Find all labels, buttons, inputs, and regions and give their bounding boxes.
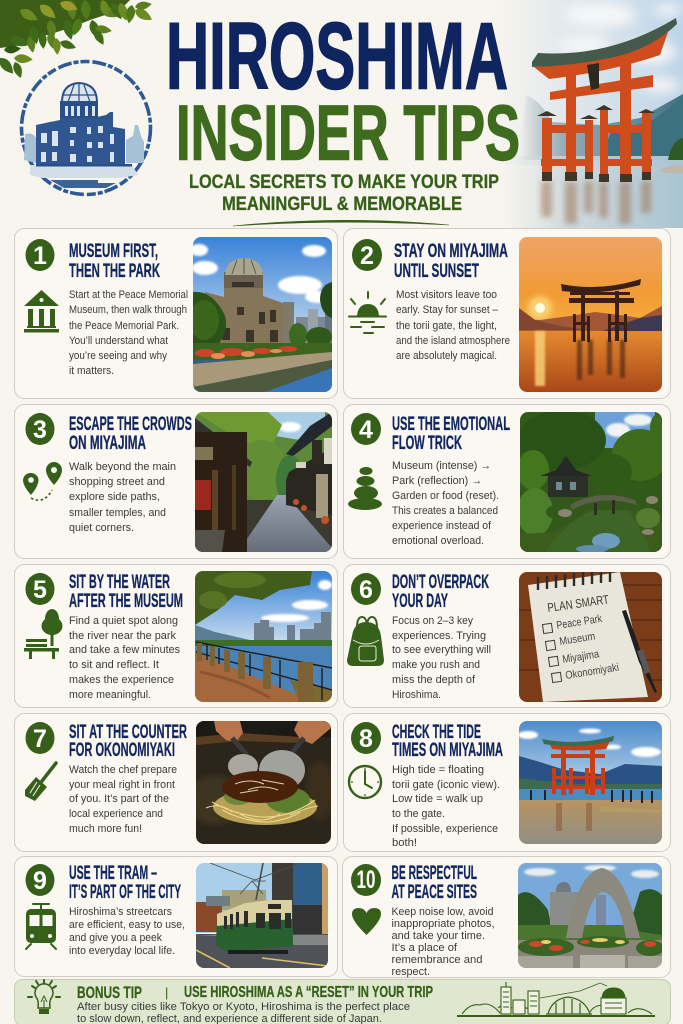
photo: river promenade [195, 571, 332, 702]
panel: tip 8 [344, 714, 670, 852]
heading tip 10: BE RESPECTFUL [392, 863, 477, 884]
bonus heading: USE HIROSHIMA AS A “RESET” IN YOUR TRIP [184, 984, 433, 1001]
heading tip 10: AT PEACE SITES [392, 882, 477, 903]
subtitle: MEANINGFUL & MEMORABLE [222, 194, 462, 215]
number badge 1: 1 [33, 242, 47, 270]
heading tip 2 [394, 241, 508, 282]
text tip 5: to sit and reflect. It [69, 659, 160, 671]
photo: okonomiyaki on griddle [196, 721, 331, 844]
panel: tip 7 [14, 714, 338, 852]
torii pillars and beams [532, 18, 677, 182]
text tip 3: explore side paths, [69, 491, 160, 503]
heading tip 1 [69, 241, 160, 282]
text tip 8: High tide = floating [392, 764, 484, 776]
number badge 8: 8 [359, 725, 373, 753]
bonus text: After busy cities like Tokyo or Kyoto, Hiroshima is the perfect place [77, 1001, 410, 1013]
number badge 3 [26, 413, 54, 445]
text tip 4: emotional overload. [392, 535, 484, 547]
heading tip 1: MUSEUM FIRST, [69, 241, 158, 262]
text tip 3: Walk beyond the main [69, 461, 176, 473]
text tip 7: local experience and [69, 808, 163, 820]
text tip 1 [69, 289, 188, 377]
icon: lightbulb [28, 980, 60, 1014]
number badge 10: 10 [356, 866, 376, 894]
heading tip 5: SIT BY THE WATER [69, 572, 170, 593]
text tip 5: the river near the park [69, 630, 176, 642]
heading tip 4 [392, 414, 510, 454]
text tip 10: remembrance and [392, 954, 482, 966]
photo: plan smart notebook: Museum [559, 630, 596, 648]
subtitle [189, 172, 499, 215]
icon: tram [26, 904, 56, 949]
photo: sunset torii [519, 237, 662, 392]
text tip 2: early. Stay for sunset – [396, 304, 499, 316]
number badge 4 [351, 413, 381, 445]
heading tip 2: STAY ON MIYAJIMA [394, 241, 508, 262]
photo: plan smart notebook [519, 572, 662, 702]
text tip 4: Garden or food (reset). [392, 490, 499, 502]
panel: tip 5 [14, 564, 338, 708]
text tip 1: Museum, then walk through [69, 304, 187, 316]
icon: spatula [25, 763, 56, 801]
text tip 4: Park (reflection) → [392, 475, 482, 487]
text tip 6: make you rush and [392, 659, 480, 671]
text tip 10: inappropriate photos, [392, 918, 494, 930]
title [166, 4, 520, 176]
panel: bonus tip [14, 980, 670, 1024]
heading tip 5 [69, 572, 183, 612]
text tip 1: Start at the Peace Memorial [69, 289, 188, 301]
text tip 6: experiences. Trying [392, 630, 486, 642]
panel: tip 10 [342, 856, 670, 978]
text tip 8: to the gate. [392, 808, 445, 820]
icon: stacked zen stones [348, 467, 382, 510]
text tip 5: Find a quiet spot along [69, 615, 178, 627]
number badge 5 [26, 573, 54, 605]
number badge 9: 9 [33, 867, 47, 895]
text tip 5 [69, 615, 180, 701]
text tip 1: You’ll understand what [69, 335, 169, 347]
text tip 10 [392, 906, 494, 978]
heading tip 9: IT’S PART OF THE CITY [69, 882, 181, 903]
number badge 8 [351, 722, 381, 754]
photo: plan smart notebook: Okonomiyaki [565, 662, 620, 682]
photo: torii at low tide [519, 721, 662, 844]
text tip 5: and take a few minutes [69, 644, 180, 656]
text tip 4: This creates a balanced [392, 505, 498, 517]
header photo: floating torii gate [490, 0, 683, 228]
text tip 2 [396, 289, 510, 362]
heading tip 6: DON’T OVERPACK [392, 572, 489, 593]
heading tip 3: ESCAPE THE CROWDS [69, 414, 192, 435]
heading tip 6: YOUR DAY [392, 591, 448, 612]
text tip 1: it matters. [69, 365, 114, 377]
text tip 4: experience instead of [392, 520, 492, 532]
panel: tip 3 [14, 404, 338, 558]
heading tip 4: USE THE EMOTIONAL [392, 414, 510, 435]
heading tip 1: THEN THE PARK [69, 261, 160, 282]
icon: sunset over water [349, 292, 386, 333]
photo: plan smart notebook: Miyajima [562, 648, 601, 666]
heading tip 3: ON MIYAJIMA [69, 433, 146, 454]
icon: map pins with dotted route [23, 462, 62, 500]
heading tip 7: FOR OKONOMIYAKI [69, 740, 175, 761]
text tip 9 [69, 906, 185, 957]
number badge 4: 4 [359, 416, 373, 444]
heading tip 6 [392, 572, 489, 612]
text tip 7: Watch the chef prepare [69, 764, 177, 776]
text tip 5: makes the experience [69, 674, 174, 686]
text tip 10: It’s a place of [392, 942, 458, 954]
text tip 8 [392, 764, 500, 849]
text tip 8: torii gate (iconic view). [392, 779, 500, 791]
heading tip 10 [392, 863, 477, 903]
text tip 10: Keep noise low, avoid [392, 906, 494, 918]
icon: backpack [347, 617, 384, 666]
text tip 6: Focus on 2–3 key [392, 615, 473, 627]
text tip 8: Low tide = walk up [392, 793, 483, 805]
text tip 1: the Peace Memorial Park. [69, 320, 179, 332]
icon: museum [24, 290, 59, 332]
text tip 2: and the island atmosphere [396, 335, 510, 347]
text tip 9: and give you a peek [69, 932, 162, 944]
text tip 7 [69, 764, 177, 835]
text tip 4 [392, 460, 499, 547]
text tip 7: of you. It’s part of the [69, 793, 169, 805]
panel: tip 6 [344, 564, 670, 708]
text tip 6 [392, 615, 491, 701]
photo: atomic bomb dome [193, 237, 332, 392]
icon: bench and tree [24, 609, 62, 659]
text tip 9: are efficient, easy to use, [69, 919, 185, 931]
text tip 7: much more fun! [69, 823, 142, 835]
number badge 5: 5 [33, 576, 47, 604]
text tip 3: shopping street and [69, 476, 165, 488]
text tip 3: smaller temples, and [69, 507, 166, 519]
number badge 6 [351, 573, 381, 605]
text tip 4: Museum (intense) → [392, 460, 491, 472]
heading tip 8: CHECK THE TIDE [392, 722, 481, 743]
photo: cenotaph and dome [518, 863, 662, 968]
heading tip 7 [69, 722, 187, 761]
text tip 9: into everyday local life. [69, 945, 175, 957]
heading tip 2: UNTIL SUNSET [394, 261, 479, 282]
icon: clock [349, 766, 381, 798]
number badge 2: 2 [360, 242, 374, 270]
title: INSIDER TIPS [176, 88, 520, 176]
heading tip 3 [69, 414, 192, 454]
number badge 10 [351, 864, 381, 896]
panel: tip 2 [344, 228, 670, 398]
heading tip 7: SIT AT THE COUNTER [69, 722, 187, 743]
decorative tree branch with leaves [0, 0, 154, 79]
heading tip 9: USE THE TRAM – [69, 863, 157, 884]
number badge 9 [26, 864, 54, 896]
bonus heading: | [165, 985, 168, 1000]
text tip 6: to see everything will [392, 644, 491, 656]
text tip 9: Hiroshima’s streetcars [69, 906, 172, 918]
photo: plan smart notebook: PLAN SMART [546, 592, 610, 615]
panel: tip 9 [14, 856, 338, 976]
text tip 3: quiet corners. [69, 522, 134, 534]
heading tip 5: AFTER THE MUSEUM [69, 591, 183, 612]
badge: atomic bomb dome illustration [22, 62, 150, 194]
text tip 5: more meaningful. [69, 689, 151, 701]
text tip 7: your meal right in front [69, 779, 176, 791]
heading tip 8: TIMES ON MIYAJIMA [392, 740, 503, 761]
icon: heart [352, 908, 381, 935]
bonus heading: BONUS TIP [77, 983, 142, 1002]
text tip 2: are absolutely magical. [396, 350, 497, 362]
number badge 2 [352, 239, 382, 271]
heading tip 9 [69, 863, 181, 903]
text tip 10: respect. [392, 966, 430, 978]
heading tip 8 [392, 722, 503, 761]
photo: Miyajima side street [195, 412, 332, 552]
heading tip 4: FLOW TRICK [392, 433, 462, 454]
subtitle: LOCAL SECRETS TO MAKE YOUR TRIP [189, 172, 499, 193]
panel: tip 4 [344, 404, 670, 558]
number badge 7: 7 [33, 725, 47, 753]
text tip 8: both! [392, 837, 417, 849]
icon: Hiroshima skyline [457, 982, 655, 1016]
photo: plan smart notebook: Peace Park [556, 613, 603, 632]
number badge 3: 3 [33, 416, 47, 444]
number badge 6: 6 [359, 576, 373, 604]
text tip 6: miss the depth of [392, 674, 476, 686]
photo: Japanese garden pond [520, 412, 662, 552]
photo: Hiroshima streetcar [196, 863, 328, 968]
panel: tip 1 [14, 228, 338, 398]
text tip 1: you’re seeing and why [69, 350, 167, 362]
bonus text [77, 1001, 410, 1024]
text tip 2: the torii gate, the light, [396, 320, 497, 332]
text tip 10: and take your time. [392, 930, 485, 942]
text tip 3 [69, 461, 176, 534]
bonus heading [77, 983, 433, 1002]
number badge 7 [26, 722, 54, 754]
text tip 2: Most visitors leave too [396, 289, 497, 301]
text tip 6: Hiroshima. [392, 689, 441, 701]
text tip 8: If possible, experience [392, 823, 498, 835]
number badge 1 [26, 239, 54, 271]
